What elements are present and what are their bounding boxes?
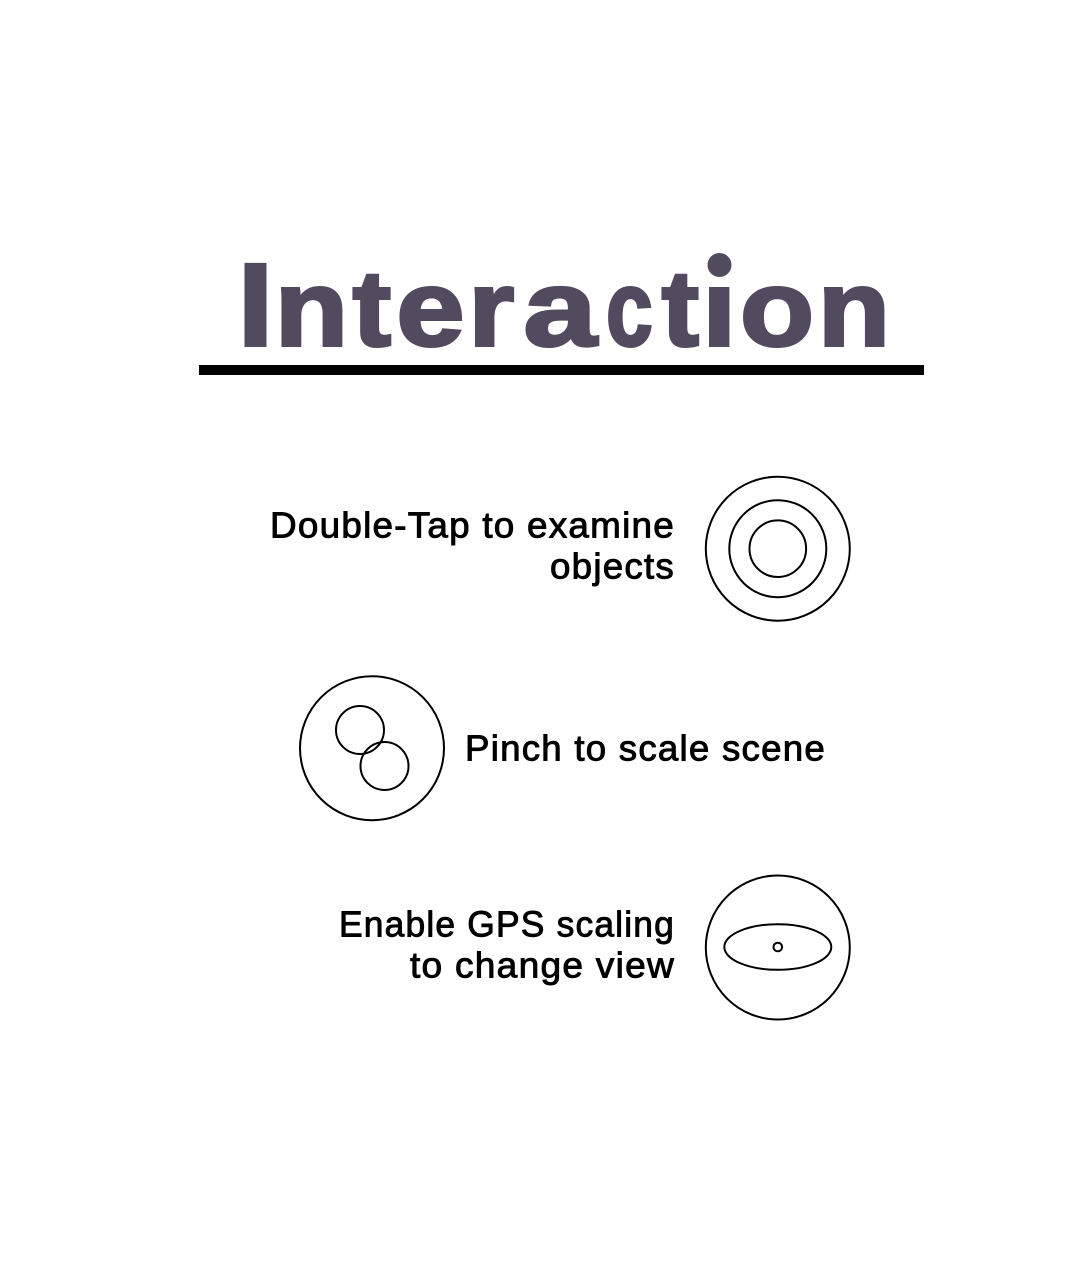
title: n xyxy=(818,248,890,368)
title: a xyxy=(524,248,598,368)
icon: pinch circles xyxy=(300,676,444,820)
title xyxy=(238,240,890,372)
text: double-tap: Double-Tap to examine xyxy=(270,504,675,546)
title: n xyxy=(275,248,348,368)
title underline xyxy=(199,365,924,375)
title: i xyxy=(702,248,736,368)
icon: double tap concentric circles xyxy=(706,477,850,621)
title: t xyxy=(662,248,699,368)
text: gps scaling: Enable GPS scaling xyxy=(339,904,675,944)
title: t xyxy=(353,248,391,368)
icon: gps sphere xyxy=(706,876,850,1020)
title: c xyxy=(606,248,653,368)
text: pinch: Pinch to scale scene xyxy=(465,728,826,768)
title: e xyxy=(396,248,465,368)
title: o xyxy=(740,248,814,368)
text: gps scaling: to change view xyxy=(410,944,675,986)
text: double-tap: objects xyxy=(550,546,675,586)
title: r xyxy=(468,248,514,368)
title: I xyxy=(238,240,274,372)
